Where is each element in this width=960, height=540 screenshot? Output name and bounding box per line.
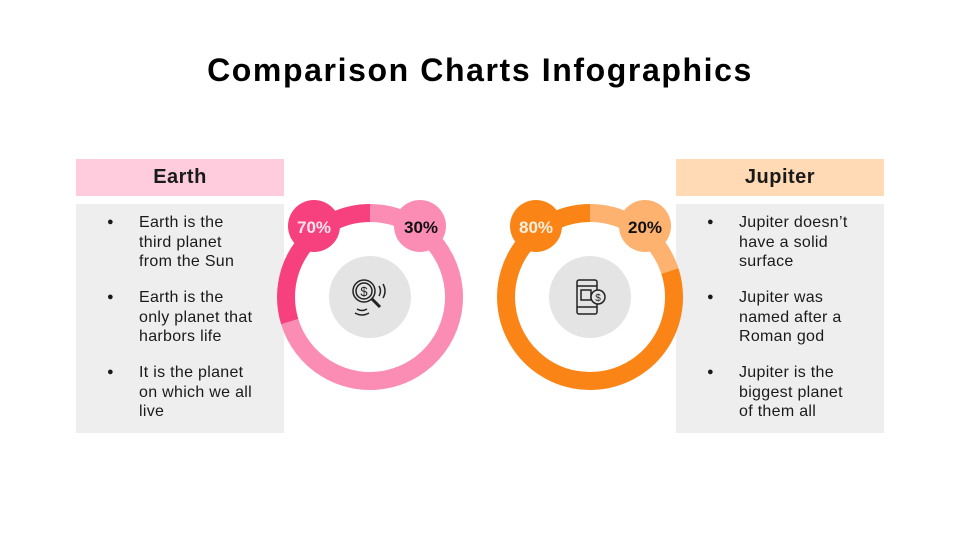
text: jupiter bullet 2: [739, 288, 884, 346]
panel: jupiter header: [676, 159, 884, 196]
icon: dollar magnifier: [353, 280, 385, 315]
text: jupiter bullet 3: of them all: [739, 403, 816, 420]
label: 30%: 30%: [404, 218, 438, 237]
icon: phone payment: $: [595, 293, 601, 304]
text: jupiter bullet 1: Jupiter doesn’t: [739, 214, 848, 231]
icon: phone payment: [577, 280, 605, 314]
panel: earth header: [76, 159, 284, 196]
text: jupiter bullet 1: [739, 213, 884, 272]
label: 20%: 20%: [628, 218, 662, 237]
text: earth bullet 1: [139, 213, 284, 272]
text: earth bullet 3: on which we all: [139, 384, 252, 400]
text: earth bullet 2: Earth is the: [139, 289, 224, 306]
text: jupiter bullet 2: Jupiter was: [739, 289, 823, 306]
text: earth bullet 1: Earth is the: [139, 214, 224, 231]
text: earth bullet 3: live: [139, 403, 164, 420]
text: jupiter bullet 1: have a solid: [739, 234, 828, 250]
text: earth bullet 2: harbors life: [139, 328, 222, 345]
chart: jupiter donut: [506, 200, 674, 381]
panel: jupiter body: [676, 204, 884, 433]
text: earth bullet 2: only planet that: [139, 308, 252, 326]
label: 20%: [619, 200, 671, 252]
text: earth bullet 1: third planet: [139, 234, 222, 250]
panel: jupiter header: Jupiter: [745, 166, 815, 188]
title: Comparison Charts Infographics: [207, 52, 753, 88]
text: earth bullet 3: It is the planet: [139, 364, 243, 381]
label: 80%: 80%: [519, 218, 553, 237]
text: jupiter bullet 2: named after a: [739, 308, 842, 326]
icon: dollar magnifier: $: [360, 284, 368, 299]
label: 70%: 70%: [297, 218, 331, 237]
panel: earth body: [76, 204, 284, 433]
label: 30%: [394, 200, 446, 252]
chart: earth donut: [286, 200, 454, 381]
text: earth bullet 3: [139, 363, 284, 422]
panel: earth header: Earth: [153, 166, 207, 188]
label: 70%: [288, 200, 340, 252]
text: jupiter bullet 1: surface: [739, 253, 794, 270]
text: jupiter bullet 3: [739, 363, 884, 422]
text: earth bullet 2: [139, 288, 284, 346]
text: jupiter bullet 2: Roman god: [739, 328, 824, 345]
text: jupiter bullet 3: Jupiter is the: [739, 364, 834, 381]
text: jupiter bullet 3: biggest planet: [739, 384, 843, 400]
label: 80%: [510, 200, 562, 252]
text: earth bullet 1: from the Sun: [139, 253, 234, 270]
